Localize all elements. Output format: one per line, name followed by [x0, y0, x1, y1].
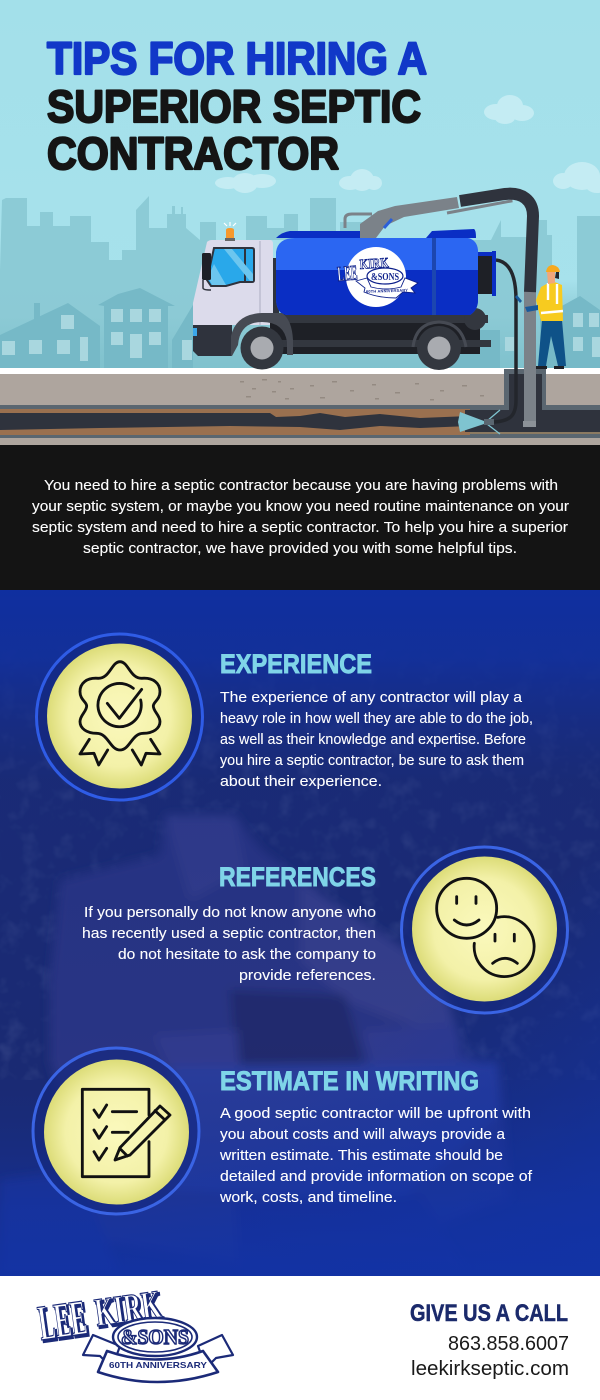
- houses silhouettes: [0, 288, 600, 368]
- panel: intro: your septic system, or maybe you know you need routine maintenance on your: [32, 498, 569, 515]
- title: [47, 33, 427, 179]
- panel: intro: You need to hire a septic contractor because you are having problems with: [44, 477, 558, 494]
- heading: ESTIMATE IN WRITING: [220, 1066, 479, 1096]
- clouds: [215, 95, 600, 193]
- heading: EXPERIENCE: [220, 649, 372, 679]
- tip: experience: [36, 634, 533, 800]
- panel: tips background: [0, 590, 600, 1276]
- body text: The experience of any contractor will play a: [220, 689, 523, 706]
- tank logo: 60TH ANNIVERSARY: [366, 288, 408, 294]
- excavation pit: [470, 369, 600, 438]
- tip: estimate in writing: [33, 1048, 533, 1214]
- logo: LEE: [37, 1291, 92, 1353]
- fender and wheels: [231, 313, 293, 356]
- logo: [35, 1281, 233, 1382]
- tank: [276, 238, 478, 315]
- logo: &SONS: [121, 1325, 189, 1349]
- tank logo: [336, 247, 418, 307]
- heading: REFERENCES: [219, 862, 376, 892]
- window: [207, 248, 254, 286]
- vertical pipe: [524, 290, 536, 422]
- worker: [515, 265, 566, 369]
- ground layers: [0, 368, 600, 374]
- body text: If you personally do not know anyone who: [84, 904, 376, 921]
- body text: [219, 1105, 533, 1206]
- body text: [220, 689, 533, 790]
- body text: detailed and provide information on scope of: [220, 1168, 533, 1185]
- icon: happy and sad faces: [402, 847, 568, 1013]
- title: CONTRACTOR: [47, 128, 339, 179]
- panel: footer: [0, 1276, 600, 1400]
- tank logo: &SONS: [371, 272, 399, 283]
- body text: written estimate. This estimate should be: [219, 1147, 503, 1164]
- contact: GIVE US A CALL: [410, 1300, 568, 1327]
- body text: heavy role in how well they are able to do the job,: [220, 710, 533, 727]
- tank logo: KIRK: [359, 256, 389, 273]
- boom arm: [345, 188, 533, 292]
- logo: 60TH ANNIVERSARY: [109, 1360, 207, 1370]
- logo: KIRK: [94, 1283, 166, 1337]
- body text: you about costs and will always provide a: [220, 1126, 506, 1143]
- tank chassis: [273, 258, 279, 325]
- water spray: [458, 412, 484, 432]
- title: SUPERIOR SEPTIC: [47, 81, 421, 132]
- tip: references: [82, 847, 568, 1013]
- icon: award badge: [36, 634, 202, 800]
- panel: intro: septic contractor, we have provided you with some helpful tips.: [83, 540, 517, 557]
- thin hose: [494, 260, 516, 422]
- body text: as well as their knowledge and expertise. Before: [220, 731, 526, 748]
- beacon: [225, 238, 235, 241]
- body text: provide references.: [239, 967, 376, 984]
- body text: do not hesitate to ask the company to: [118, 946, 376, 963]
- body text: work, costs, and timeline.: [219, 1189, 397, 1206]
- body text: [82, 904, 376, 984]
- contact: 863.858.6007: [448, 1333, 569, 1355]
- icon: checklist and pencil: [33, 1048, 199, 1214]
- photo: man silhouette: [49, 826, 498, 1126]
- panel: hero scene: [0, 0, 600, 445]
- cab: [193, 240, 273, 325]
- contact: [410, 1300, 569, 1380]
- body text: A good septic contractor will be upfront with: [220, 1105, 531, 1122]
- contact: leekirkseptic.com: [411, 1358, 569, 1380]
- body text: about their experience.: [220, 773, 382, 790]
- logo: LEE: [35, 1289, 90, 1351]
- title: TIPS FOR HIRING A: [47, 33, 427, 84]
- panel: intro: septic system and need to hire a septic contractor. To help you hire a superior: [32, 519, 568, 536]
- body text: has recently used a septic contractor, then: [82, 925, 376, 942]
- logo: KIRK: [92, 1281, 164, 1335]
- panel: intro: [0, 445, 600, 591]
- city skyline: [0, 196, 216, 370]
- truck: [193, 222, 496, 370]
- body text: you hire a septic contractor, be sure to ask them: [220, 752, 524, 769]
- tank logo: LEE: [336, 260, 358, 286]
